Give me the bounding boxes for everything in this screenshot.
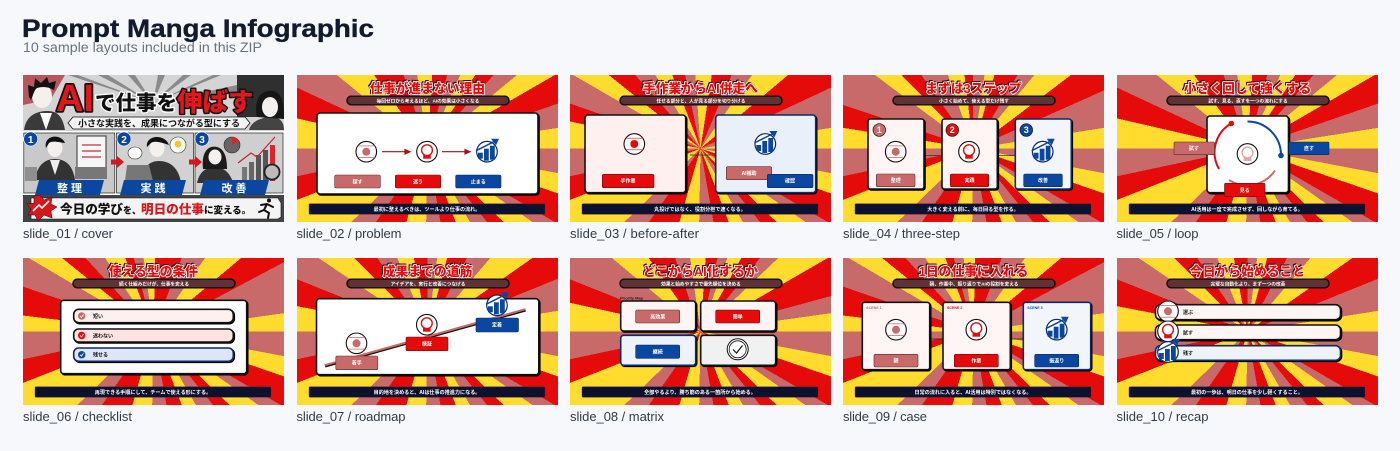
bottom message: 全部やるより、勝ち筋のある一箇所から始める。 [644,389,756,396]
icon: bulb [416,141,437,162]
card: high impact: 高効果 [650,314,665,320]
icon: target [1157,301,1178,322]
caption: SCENE 3 [1027,306,1043,310]
heading: 成果までの道筋 [382,264,472,279]
bottom message [308,387,544,397]
row: short [74,309,233,323]
bottom message [308,204,544,214]
arrow [382,150,410,154]
panel number badges: 1 [28,135,34,146]
subheading bar: 効果と始めやすさで優先順位を決める [661,280,741,287]
heading: 小さく回して強くする [1183,81,1311,96]
icon: chart [754,131,777,154]
icon: target [346,333,366,354]
card: easy [701,301,776,331]
label: AI assist: AI補助 [741,170,757,177]
badge 1: 1 [877,125,882,135]
arrow [442,150,470,154]
arc: blue [1247,122,1283,158]
heading: 仕事が進まない理由 [369,81,485,96]
cover title: で仕事を [95,91,177,115]
icon: bulb [1157,321,1178,342]
subheading bar [1166,96,1328,105]
label: stop [455,175,500,188]
heading: どこからAI化するか [643,264,758,279]
blue label bars: 改 善 [221,181,247,195]
label: 振返り [1049,358,1064,364]
subheading bar: 毎回ゼロから考えるほど、AIの効果は小さくなる [376,97,479,104]
page heading [22,15,374,55]
subheading bar [893,279,1055,288]
bottom message [35,387,271,397]
panel: checklist [61,300,247,374]
scene 1 card [862,302,930,370]
bottom message: 目的地を決めると、AIは仕事の推進力になる。 [373,389,480,396]
slide 06: checklist [23,258,284,405]
subheading bar [620,96,782,105]
label: verify: 検証 [421,340,432,348]
label: manual work: 手作業 [620,178,636,185]
cover subtitle ribbon: 小さな実践を、成果につながる型にする [78,117,240,128]
slide 02: problem [296,75,558,222]
cover right character [249,91,284,130]
text: 残す [1182,350,1193,357]
bottom message [582,204,818,214]
badge 2: 2 [950,125,955,135]
subheading bar [1166,279,1328,288]
subheading bar: 任せる部分と、人が見る部分を切り分ける [657,97,746,104]
subheading bar [346,279,508,288]
label: 実践 [964,177,975,184]
slide captions: slide_09 / case [843,409,927,424]
slide captions: slide_07 / roadmap [296,409,406,424]
subheading bar: 続く仕組みだけが、仕事を変える [119,280,189,287]
row: no hesitation: 迷わない [93,332,113,339]
subheading bar: 小さく始めて、使える型だけ残す [939,97,1009,104]
row: keepable [74,348,233,361]
subheading bar [620,279,782,288]
subheading bar [73,279,235,288]
card: continue: 継続 [653,348,663,356]
label: hesitate [395,175,440,188]
slide captions: slide_03 / before-after [570,226,700,241]
icon: chart [1156,339,1180,362]
subheading bar [346,96,508,105]
slide captions: slide_02 / problem [296,226,402,241]
icon: chart [486,292,508,316]
cover bottom message: 今日の学びを、明日の仕事に変える。 [60,202,251,216]
slide captions: slide_04 / three-step [843,226,960,241]
panel 1 person and clipboard [25,136,107,181]
label: try: 試す [1188,145,1199,152]
label: 整理 [891,177,901,184]
row: keepable: 残せる [93,352,108,358]
card: check [701,335,776,365]
panel: flow [316,113,538,194]
subheading bar: 試す、見る、直すを一つの流れにする [1208,97,1287,104]
label: search: 探す [352,178,362,185]
heading: 使える型の条件 [109,264,198,279]
bottom message: 日常の流れに入ると、AI活用は特別ではなくなる。 [915,389,1031,396]
label: look: 見る [1239,187,1249,194]
cover top band background [23,75,284,131]
page heading: 10 sample layouts included in this ZIP [23,40,262,55]
connectors [925,155,1015,157]
subheading bar [893,96,1055,105]
heading: 1日の仕事に入れる [919,264,1028,279]
icon: bulb [416,314,437,335]
heading: 手作業からAI併走へ [643,81,758,96]
card: continue [621,335,696,365]
bottom message: 最初の一歩は、明日の仕事を少し軽くすること。 [1190,389,1303,396]
icon: bulb [959,141,979,162]
bottom message: 大きく変える前に、毎日回る型を作る。 [927,206,1019,213]
step 3 card [1015,119,1071,189]
subheading bar: 朝、作業中、振り返りでAIの役割を変える [930,280,1019,287]
heading: 今日から始めること [1189,264,1305,279]
icon: bulb [1237,144,1257,164]
blue label bars [35,180,269,195]
red arrows between panels [111,156,202,168]
label: hesitate: 迷う [412,178,423,185]
slide 05: loop [1116,75,1378,222]
label: fix: 直す [1303,145,1314,152]
text: 試す [1182,329,1193,336]
arc: rose [1228,170,1274,185]
icon: target [885,141,906,162]
label: start: 着手 [351,360,361,366]
subheading bar: アイデアを、実行と改善につなげる [390,280,465,287]
slide captions [23,226,1208,424]
card: easy: 簡単 [733,314,743,320]
scene 3 card [1023,302,1091,370]
row: try [1155,321,1340,342]
text: 選ぶ [1182,309,1193,316]
slide captions: slide_10 / recap [1116,409,1208,424]
panel number badges: 3 [199,135,205,146]
cover left character [24,77,65,130]
label: confirm: 確認 [785,178,795,185]
slide 10: recap [1116,258,1378,405]
bottom message: AI活用は一度で完成させず、回しながら育てる。 [1191,206,1302,213]
label: look [1224,183,1264,197]
slide 04: three-step [843,75,1104,222]
label: 改善 [1038,177,1048,184]
matrix caption: Priority Map [620,296,644,300]
bottom message: 再現できる手順にして、チームで使える形にする。 [95,389,211,396]
step 2 card [942,119,997,189]
row: keep [1155,339,1340,362]
label: settle [476,318,518,332]
bottom message [855,387,1091,397]
heading: まずは3ステップ [925,81,1022,96]
icon: target [624,134,645,154]
slide 01: cover [23,75,284,222]
cover title [56,78,254,120]
bottom message [1128,204,1364,214]
slide 07: roadmap [296,258,558,405]
bottom message [1128,387,1364,397]
runner icon [259,198,273,218]
panel number badges: 2 [121,135,127,146]
label: try [1174,142,1214,155]
scene 2 card [943,302,1010,370]
row: choose [1155,301,1340,322]
card: high impact [621,301,696,331]
bottom message [582,387,818,397]
panel: loop [1206,116,1288,193]
connector [690,154,711,156]
icon: chart [476,139,498,162]
caption: SCENE 2 [947,306,962,310]
cover panels row [23,131,284,197]
red burst icon [27,195,57,221]
blue label bars: 整 理 [57,181,82,195]
panel 2 person with laptop [125,137,186,183]
panel 3 person, pie and bars [197,137,280,183]
label: verify [406,337,448,351]
step 1 card [868,119,924,189]
slide 08: matrix [570,258,831,405]
bottom message: 丸投げではなく、役割分担で速くなる。 [654,206,746,213]
icon: chart [1032,139,1055,162]
badge 3: 3 [1024,125,1029,135]
subheading bar: 完璧な自動化より、まず一つの改善 [1210,280,1285,287]
arc: red [1214,121,1234,169]
connectors [930,338,1023,340]
row: no hesitation [74,329,233,342]
slide 03: before-after [570,75,831,222]
panel number badges [24,132,209,146]
panel: before [585,115,686,193]
icon: target [886,319,906,340]
panel: road [316,292,538,375]
slide captions: slide_01 / cover [23,226,114,241]
label: search [334,175,380,188]
icon: bulb [966,319,987,340]
bottom message [855,204,1091,214]
slide captions: slide_08 / matrix [570,409,664,424]
cover bottom band [23,195,284,222]
label: 朝 [893,358,899,364]
label: start [335,356,377,370]
icon: target [356,141,376,162]
label: fix [1288,142,1328,155]
slide captions: slide_06 / checklist [23,409,132,424]
cover title: 伸ばす [177,89,254,117]
page heading: Prompt Manga Infographic [22,15,374,43]
slide captions: slide_05 / loop [1116,226,1198,241]
bottom message: 最初に整えるべきは、ツールより仕事の流れ。 [373,206,480,213]
label: stop: 止まる [470,178,485,185]
blue label bars: 実 践 [140,181,166,195]
label: settle: 定着 [491,322,502,329]
slide 09: case [843,258,1104,405]
cover title: AI [56,78,94,120]
row: short: 短い [93,313,103,320]
road line [324,309,525,366]
icon: chart [1046,317,1069,340]
panel: after [716,115,816,193]
caption: SCENE 1 [866,306,882,310]
label: 作業 [971,358,981,364]
